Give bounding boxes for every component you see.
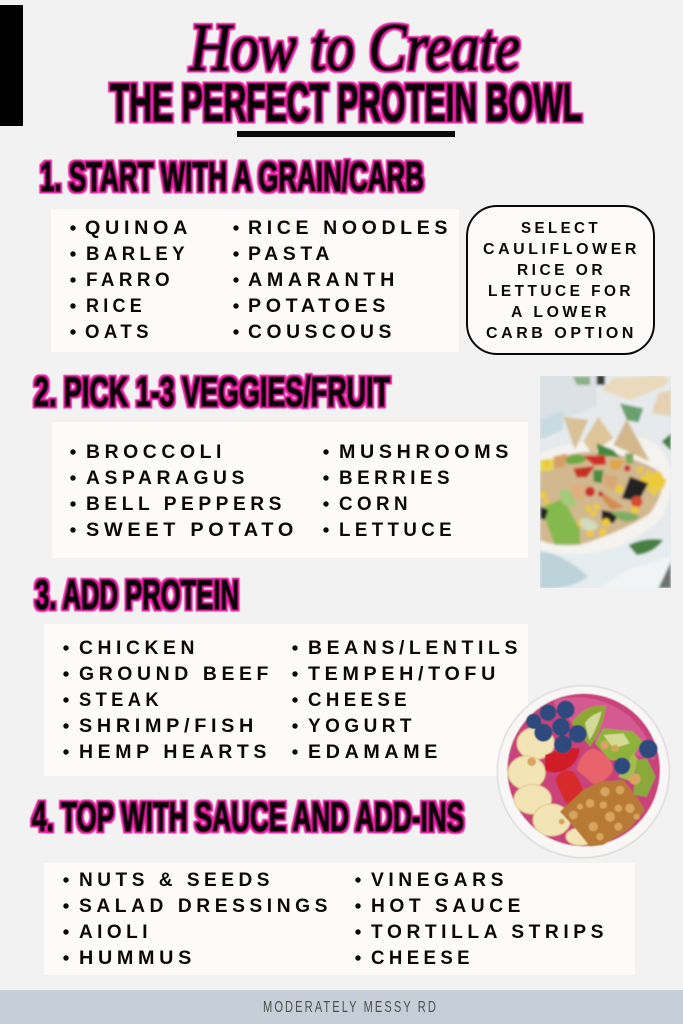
- panel: sauces and add-ins: CHEESE: [371, 948, 474, 969]
- panel: grains and carbs: COUSCOUS: [248, 322, 396, 343]
- panel: grains and carbs: PASTA: [248, 244, 334, 265]
- panel: protein: HEMP HEARTS: [79, 742, 271, 763]
- callout: lower carb tip: CAULIFLOWER: [483, 241, 640, 258]
- panel: sauces and add-ins: TORTILLA STRIPS: [371, 922, 608, 943]
- heading: step 3: 3. ADD PROTEIN: [35, 571, 239, 618]
- panel: veggies and fruit: LETTUCE: [339, 520, 456, 541]
- panel: sauces and add-ins: SALAD DRESSINGS: [79, 896, 332, 917]
- heading: step 1: 1. START WITH A GRAIN/CARB: [40, 153, 424, 200]
- panel: protein: [44, 624, 528, 776]
- panel: veggies and fruit: ASPARAGUS: [86, 468, 249, 489]
- panel: veggies and fruit: BROCCOLI: [86, 442, 226, 463]
- panel: protein: CHICKEN: [79, 638, 199, 659]
- panel: grains and carbs: POTATOES: [248, 296, 390, 317]
- panel: protein: TEMPEH/TOFU: [308, 664, 500, 685]
- panel: grains and carbs: AMARANTH: [248, 270, 399, 291]
- panel: grains and carbs: RICE: [86, 296, 146, 317]
- panel: sauces and add-ins: VINEGARS: [371, 870, 508, 891]
- callout: lower carb tip: [467, 206, 654, 354]
- panel: sauces and add-ins: HUMMUS: [79, 948, 196, 969]
- callout: lower carb tip: CARB OPTION: [486, 325, 637, 342]
- panel: veggies and fruit: [52, 422, 528, 558]
- panel: veggies and fruit: SWEET POTATO: [86, 520, 298, 541]
- panel: veggies and fruit: MUSHROOMS: [339, 442, 513, 463]
- panel: grains and carbs: RICE NOODLES: [248, 218, 452, 239]
- panel: grains and carbs: OATS: [85, 322, 153, 343]
- panel: protein: BEANS/LENTILS: [308, 638, 522, 659]
- panel: protein: CHEESE: [308, 690, 411, 711]
- title: [110, 9, 582, 133]
- panel: protein: STEAK: [79, 690, 163, 711]
- panel: grains and carbs: BARLEY: [86, 244, 189, 265]
- callout: lower carb tip: SELECT: [521, 220, 601, 237]
- title script line: How to Create: [189, 9, 520, 85]
- callout: lower carb tip: A LOWER: [511, 304, 610, 321]
- footer credit: MODERATELY MESSY RD: [263, 999, 438, 1016]
- panel: sauces and add-ins: [44, 863, 635, 975]
- panel: protein: GROUND BEEF: [79, 664, 273, 685]
- panel: grains and carbs: FARRO: [86, 270, 174, 291]
- photo: smoothie bowl with fruit and granola: [497, 686, 669, 858]
- title underline: [237, 131, 455, 137]
- photo: salad bowl with chips: [540, 376, 671, 588]
- panel: veggies and fruit: BERRIES: [339, 468, 454, 489]
- footer band: [0, 990, 683, 1024]
- panel: sauces and add-ins: AIOLI: [79, 922, 152, 943]
- black corner tab: [0, 5, 23, 126]
- panel: grains and carbs: QUINOA: [85, 218, 192, 239]
- panel: veggies and fruit: CORN: [339, 494, 412, 515]
- panel: sauces and add-ins: HOT SAUCE: [371, 896, 525, 917]
- panel: grains and carbs: [51, 209, 459, 352]
- callout: lower carb tip: LETTUCE FOR: [488, 283, 634, 300]
- panel: sauces and add-ins: NUTS & SEEDS: [79, 870, 274, 891]
- panel: protein: SHRIMP/FISH: [79, 716, 258, 737]
- panel: protein: EDAMAME: [308, 742, 442, 763]
- panel: protein: YOGURT: [308, 716, 416, 737]
- heading: step 2: 2. PICK 1-3 VEGGIES/FRUIT: [34, 368, 390, 415]
- panel: veggies and fruit: BELL PEPPERS: [86, 494, 286, 515]
- callout: lower carb tip: RICE OR: [517, 262, 606, 279]
